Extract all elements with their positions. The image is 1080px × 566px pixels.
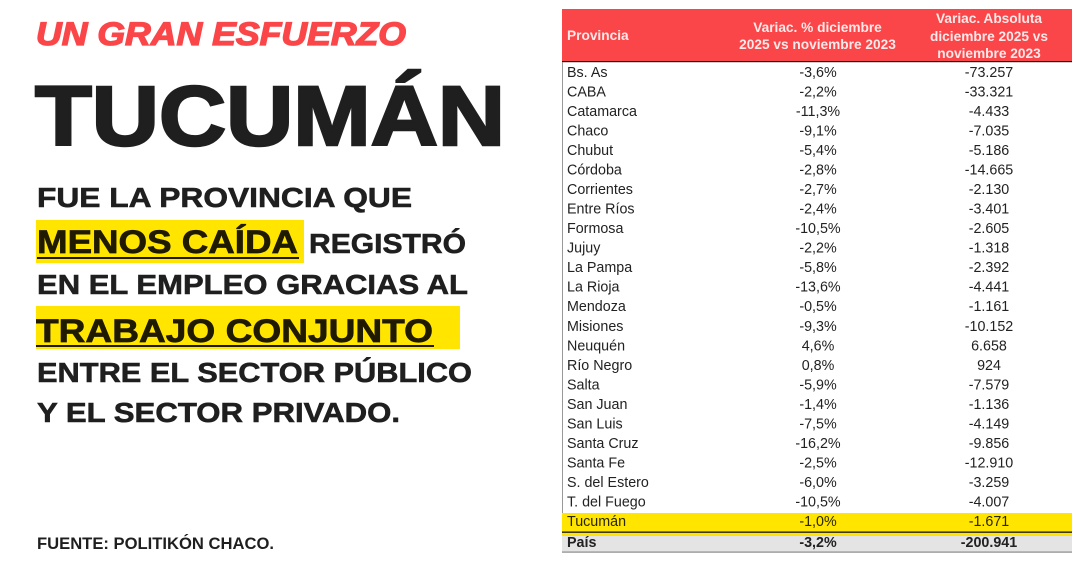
row: Santa Fe: Santa Fe	[567, 455, 625, 471]
row: Bs. As: Bs. As	[567, 65, 608, 81]
row: Catamarca	[567, 104, 1009, 120]
row: Bs. As	[567, 65, 1013, 81]
row: La Pampa: -5,8%	[799, 260, 837, 276]
text block: main message: FUE LA PROVINCIA QUE	[37, 182, 412, 213]
row: San Juan: -1.136	[969, 397, 1009, 413]
row: Santa Cruz: -16,2%	[795, 436, 841, 452]
row: Santa Cruz: -9.856	[969, 436, 1009, 452]
row: Bs. As: -3,6%	[799, 65, 837, 81]
row: Formosa: Formosa	[567, 221, 623, 237]
row: CABA	[567, 84, 1013, 100]
row: Chubut	[567, 143, 1009, 159]
row: Misiones: -9,3%	[799, 319, 837, 335]
row: Tucumán highlighted: Tucumán	[567, 514, 626, 530]
row: Salta	[567, 377, 1009, 393]
row: Formosa	[567, 221, 1009, 237]
row: T. del Fuego: -4.007	[969, 494, 1009, 510]
row: Catamarca: Catamarca	[567, 104, 637, 120]
row: Mendoza: -1.161	[969, 299, 1009, 315]
table header: 2025 vs noviembre 2023	[739, 37, 896, 52]
row: San Luis: -7,5%	[799, 416, 837, 432]
row: Formosa: -2.605	[969, 221, 1009, 237]
row: Corrientes	[567, 182, 1009, 198]
row: San Luis: San Luis	[567, 416, 623, 432]
row: Salta: Salta	[567, 377, 600, 393]
table header: Variac. Absoluta	[936, 11, 1042, 26]
row: Corrientes: -2.130	[969, 182, 1009, 198]
row: San Luis	[567, 416, 1009, 432]
row: Chubut: -5.186	[969, 143, 1009, 159]
row: T. del Fuego: -10,5%	[795, 494, 841, 510]
table header: diciembre 2025 vs	[930, 29, 1048, 44]
row: Neuquén: Neuquén	[567, 338, 625, 354]
row: País total	[562, 532, 1072, 553]
row: T. del Fuego	[567, 494, 1009, 510]
row: Chaco: -7.035	[969, 124, 1009, 140]
row: Jujuy: -1.318	[969, 241, 1009, 257]
highlight: menos caída: MENOS CAÍDA	[37, 224, 298, 260]
row: La Pampa: La Pampa	[567, 260, 632, 276]
source note: FUENTE: POLITIKÓN CHACO.	[37, 534, 274, 553]
text block: main message: ENTRE EL SECTOR PÚBLICO	[37, 357, 472, 388]
row: CABA: -2,2%	[799, 84, 837, 100]
row: Jujuy	[567, 241, 1009, 257]
row: Santa Fe	[567, 455, 1013, 471]
row: Corrientes: Corrientes	[567, 182, 633, 198]
row: Neuquén: 6.658	[971, 338, 1007, 354]
row: Mendoza: -0,5%	[799, 299, 837, 315]
row: Jujuy: -2,2%	[799, 241, 837, 257]
row: Jujuy: Jujuy	[567, 241, 601, 257]
row: San Juan	[567, 397, 1009, 413]
row: Misiones: -10.152	[965, 319, 1013, 335]
highlight: trabajo conjunto: TRABAJO CONJUNTO	[36, 313, 433, 349]
row: Salta: -7.579	[969, 377, 1009, 393]
table header: Provincia	[567, 28, 629, 43]
table header: Variac. % diciembre	[753, 20, 882, 35]
row: Neuquén: 4,6%	[802, 338, 835, 354]
row: Tucumán highlighted: -1.671	[969, 514, 1009, 530]
row: Catamarca: -4.433	[969, 104, 1009, 120]
row: San Luis: -4.149	[969, 416, 1009, 432]
row: Bs. As: -73.257	[965, 65, 1013, 81]
row: Entre Ríos: -3.401	[969, 202, 1009, 218]
text block: main message: Y EL SECTOR PRIVADO.	[37, 397, 400, 428]
row: Misiones	[567, 319, 1013, 335]
row: Salta: -5,9%	[799, 377, 837, 393]
row: Santa Cruz	[567, 436, 1009, 452]
row: Catamarca: -11,3%	[796, 104, 840, 120]
row: Entre Ríos	[567, 202, 1009, 218]
row: S. del Estero: S. del Estero	[567, 475, 649, 491]
row: Río Negro	[567, 358, 1001, 374]
highlight: trabajo conjunto	[36, 306, 460, 349]
row: CABA: CABA	[567, 84, 606, 100]
row: Corrientes: -2,7%	[799, 182, 837, 198]
row: País total: País	[567, 535, 596, 551]
row: Chubut: -5,4%	[799, 143, 837, 159]
text block: main message: EN EL EMPLEO GRACIAS AL	[37, 269, 468, 300]
row: Río Negro: 924	[977, 358, 1001, 374]
row: San Juan: San Juan	[567, 397, 627, 413]
row: La Rioja: -13,6%	[795, 280, 841, 296]
row: País total: -200.941	[961, 535, 1017, 551]
row: Córdoba: -14.665	[965, 163, 1013, 179]
row: Río Negro: 0,8%	[802, 358, 835, 374]
row: Formosa: -10,5%	[795, 221, 841, 237]
row: CABA: -33.321	[965, 84, 1013, 100]
row: San Juan: -1,4%	[799, 397, 837, 413]
heading: un gran esfuerzo: UN GRAN ESFUERZO	[36, 16, 406, 52]
title: Tucumán: TUCUMÁN	[35, 69, 505, 163]
row: Córdoba	[567, 163, 1013, 179]
row: La Rioja: -4.441	[969, 280, 1009, 296]
row: T. del Fuego: T. del Fuego	[567, 494, 646, 510]
row: Entre Ríos: Entre Ríos	[567, 202, 635, 218]
row: S. del Estero	[567, 475, 1009, 491]
row: Mendoza: Mendoza	[567, 299, 626, 315]
row: Misiones: Misiones	[567, 319, 623, 335]
row: Santa Fe: -12.910	[965, 455, 1013, 471]
row: La Rioja: La Rioja	[567, 280, 620, 296]
text block: main message: REGISTRÓ	[309, 228, 466, 259]
row: La Pampa	[567, 260, 1009, 276]
data table	[562, 9, 1072, 553]
row: Santa Cruz: Santa Cruz	[567, 436, 639, 452]
row: Santa Fe: -2,5%	[799, 455, 837, 471]
row: La Rioja	[567, 280, 1009, 296]
row: Tucumán highlighted	[562, 513, 1072, 536]
row: Río Negro: Río Negro	[567, 358, 632, 374]
row: S. del Estero: -3.259	[969, 475, 1009, 491]
row: Córdoba: Córdoba	[567, 163, 622, 179]
row: Mendoza	[567, 299, 1009, 315]
row: Entre Ríos: -2,4%	[799, 202, 837, 218]
row: Chaco: -9,1%	[799, 124, 837, 140]
table header: noviembre 2023	[937, 46, 1041, 61]
row: Córdoba: -2,8%	[799, 163, 837, 179]
text block: main message	[36, 182, 472, 428]
row: Chubut: Chubut	[567, 143, 613, 159]
row: País total: -3,2%	[799, 535, 837, 551]
row: La Pampa: -2.392	[969, 260, 1009, 276]
row: Chaco	[567, 124, 1009, 140]
row: S. del Estero: -6,0%	[799, 475, 837, 491]
row: Neuquén	[567, 338, 1007, 354]
row: Chaco: Chaco	[567, 124, 608, 140]
table header	[562, 9, 1072, 62]
row: Tucumán highlighted: -1,0%	[799, 514, 837, 530]
